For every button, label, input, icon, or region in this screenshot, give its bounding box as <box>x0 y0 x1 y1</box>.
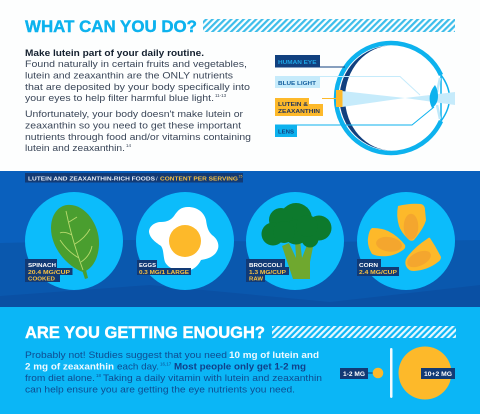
text block: unfortunately: Unfortunately, your body doesn't make lutein or <box>25 109 243 119</box>
icon: spinach leaf <box>51 205 99 279</box>
label: eggs <box>137 260 191 276</box>
text block: recommendation: Probably not! Studies suggest that you need <box>25 350 227 360</box>
foods header bar: / <box>156 176 158 182</box>
text block: lutein intro: lutein and zeaxanthin are the ONLY nutrients <box>25 70 233 80</box>
label: lutein and zeaxanthin <box>275 98 323 116</box>
heading: are you getting enough: ARE YOU GETTING ENOUGH? <box>25 324 265 342</box>
text block: lutein intro: Found naturally in certain fruits and vegetables, <box>25 59 247 69</box>
label: spinach: SPINACH <box>28 263 56 269</box>
food: corn <box>357 192 455 290</box>
small circle: 1-2 mg: 1-2 MG <box>343 372 365 378</box>
text block: lutein intro: your eyes to help filter harmful blue light. <box>25 93 214 103</box>
iris bands <box>437 78 440 119</box>
label: human eye <box>275 55 320 68</box>
label: eggs: EGGS <box>139 263 156 269</box>
panel background <box>0 307 480 414</box>
text block: unfortunately: zeaxanthin so you need to get these important <box>25 120 241 130</box>
label: lutein and zeaxanthin: ZEAXANTHIN <box>278 109 320 115</box>
text block: recommendation: 2 mg of zeaxanthin <box>25 362 114 372</box>
chart: actual vs needed intake <box>340 346 455 400</box>
blue light cone <box>342 91 455 107</box>
divider <box>390 348 392 398</box>
heading hatch stripe <box>272 326 456 338</box>
label: lutein and zeaxanthin: LUTEIN & <box>278 102 308 108</box>
panel: are you getting enough <box>0 307 480 414</box>
label: lens: LENS <box>278 130 294 136</box>
text block: lutein intro: Make lutein part of your daily routine. <box>25 48 204 58</box>
eye interior <box>337 44 445 152</box>
label: spinach <box>25 259 72 282</box>
label: blue light <box>275 76 320 88</box>
text block: recommendation: 10 mg of lutein and <box>229 350 319 360</box>
text block: recommendation: from diet alone. <box>25 373 95 383</box>
text block: recommendation: each day. <box>117 362 159 372</box>
text block: lutein intro: 11-13 <box>215 93 227 98</box>
text block: recommendation: Taking a daily vitamin with lutein and zeaxanthin <box>103 373 322 383</box>
label line: human eye <box>319 66 345 68</box>
text block: unfortunately: 14 <box>126 143 132 148</box>
icon: corn kernels <box>368 204 441 271</box>
foods header bar: 15 <box>238 174 242 178</box>
label: corn: 2.4 MG/CUP <box>359 270 397 276</box>
label line: lutein <box>322 98 337 100</box>
lens <box>430 85 438 108</box>
food: broccoli <box>246 192 344 290</box>
big circle: 10+2 mg: 10+2 MG <box>424 372 452 378</box>
food: eggs <box>136 192 234 290</box>
label: corn: CORN <box>359 263 378 269</box>
label: corn <box>357 259 399 276</box>
foods header bar: CONTENT PER SERVING <box>160 176 239 182</box>
panel background <box>0 171 480 307</box>
label: lens <box>275 124 297 137</box>
label: spinach: COOKED <box>28 276 55 282</box>
label: spinach: 20.4 MG/CUP <box>28 270 70 276</box>
eye outer wall <box>336 43 441 153</box>
text block: unfortunately <box>25 109 251 153</box>
text block: lutein intro <box>25 48 250 103</box>
label: broccoli: BROCCOLI <box>249 263 282 269</box>
eye diagram <box>275 43 455 153</box>
text block: lutein intro: that are deposited by your body specifically into <box>25 82 250 92</box>
text block: recommendation: Most people only get 1-2 mg <box>174 362 306 372</box>
label line: blue light <box>319 76 420 95</box>
label: eggs: 0.3 MG/1 LARGE <box>139 270 189 276</box>
text block: unfortunately: nutrients through food and/or vitamins containing <box>25 132 251 142</box>
text block: unfortunately: lutein and zeaxanthin. <box>25 143 125 153</box>
text block: recommendation <box>25 350 322 394</box>
label: human eye: HUMAN EYE <box>278 60 317 66</box>
retina dark arc <box>340 46 392 150</box>
foods header bar <box>25 173 243 182</box>
lutein patch <box>336 90 342 107</box>
label line: lens <box>297 107 434 125</box>
cornea <box>441 75 450 121</box>
icon: broccoli <box>262 203 332 279</box>
label: broccoli <box>246 259 289 282</box>
text block: recommendation: 18 <box>96 373 102 378</box>
foods header bar: LUTEIN AND ZEAXANTHIN-RICH FOODS <box>28 176 155 182</box>
text block: recommendation: can help ensure you are getting the eye nutrients you need. <box>25 384 295 394</box>
label: blue light: BLUE LIGHT <box>278 81 316 87</box>
panel: what can you do <box>25 18 455 153</box>
heading: what can you do: WHAT CAN YOU DO? <box>25 18 197 36</box>
panel: foods <box>0 171 480 307</box>
label: broccoli: 1.3 MG/CUP <box>249 270 286 276</box>
heading hatch stripe <box>203 19 455 32</box>
text block: recommendation: 16,17 <box>160 362 172 366</box>
label: broccoli: RAW <box>249 276 264 282</box>
food: spinach <box>25 192 123 290</box>
icon: fried egg <box>149 207 218 271</box>
